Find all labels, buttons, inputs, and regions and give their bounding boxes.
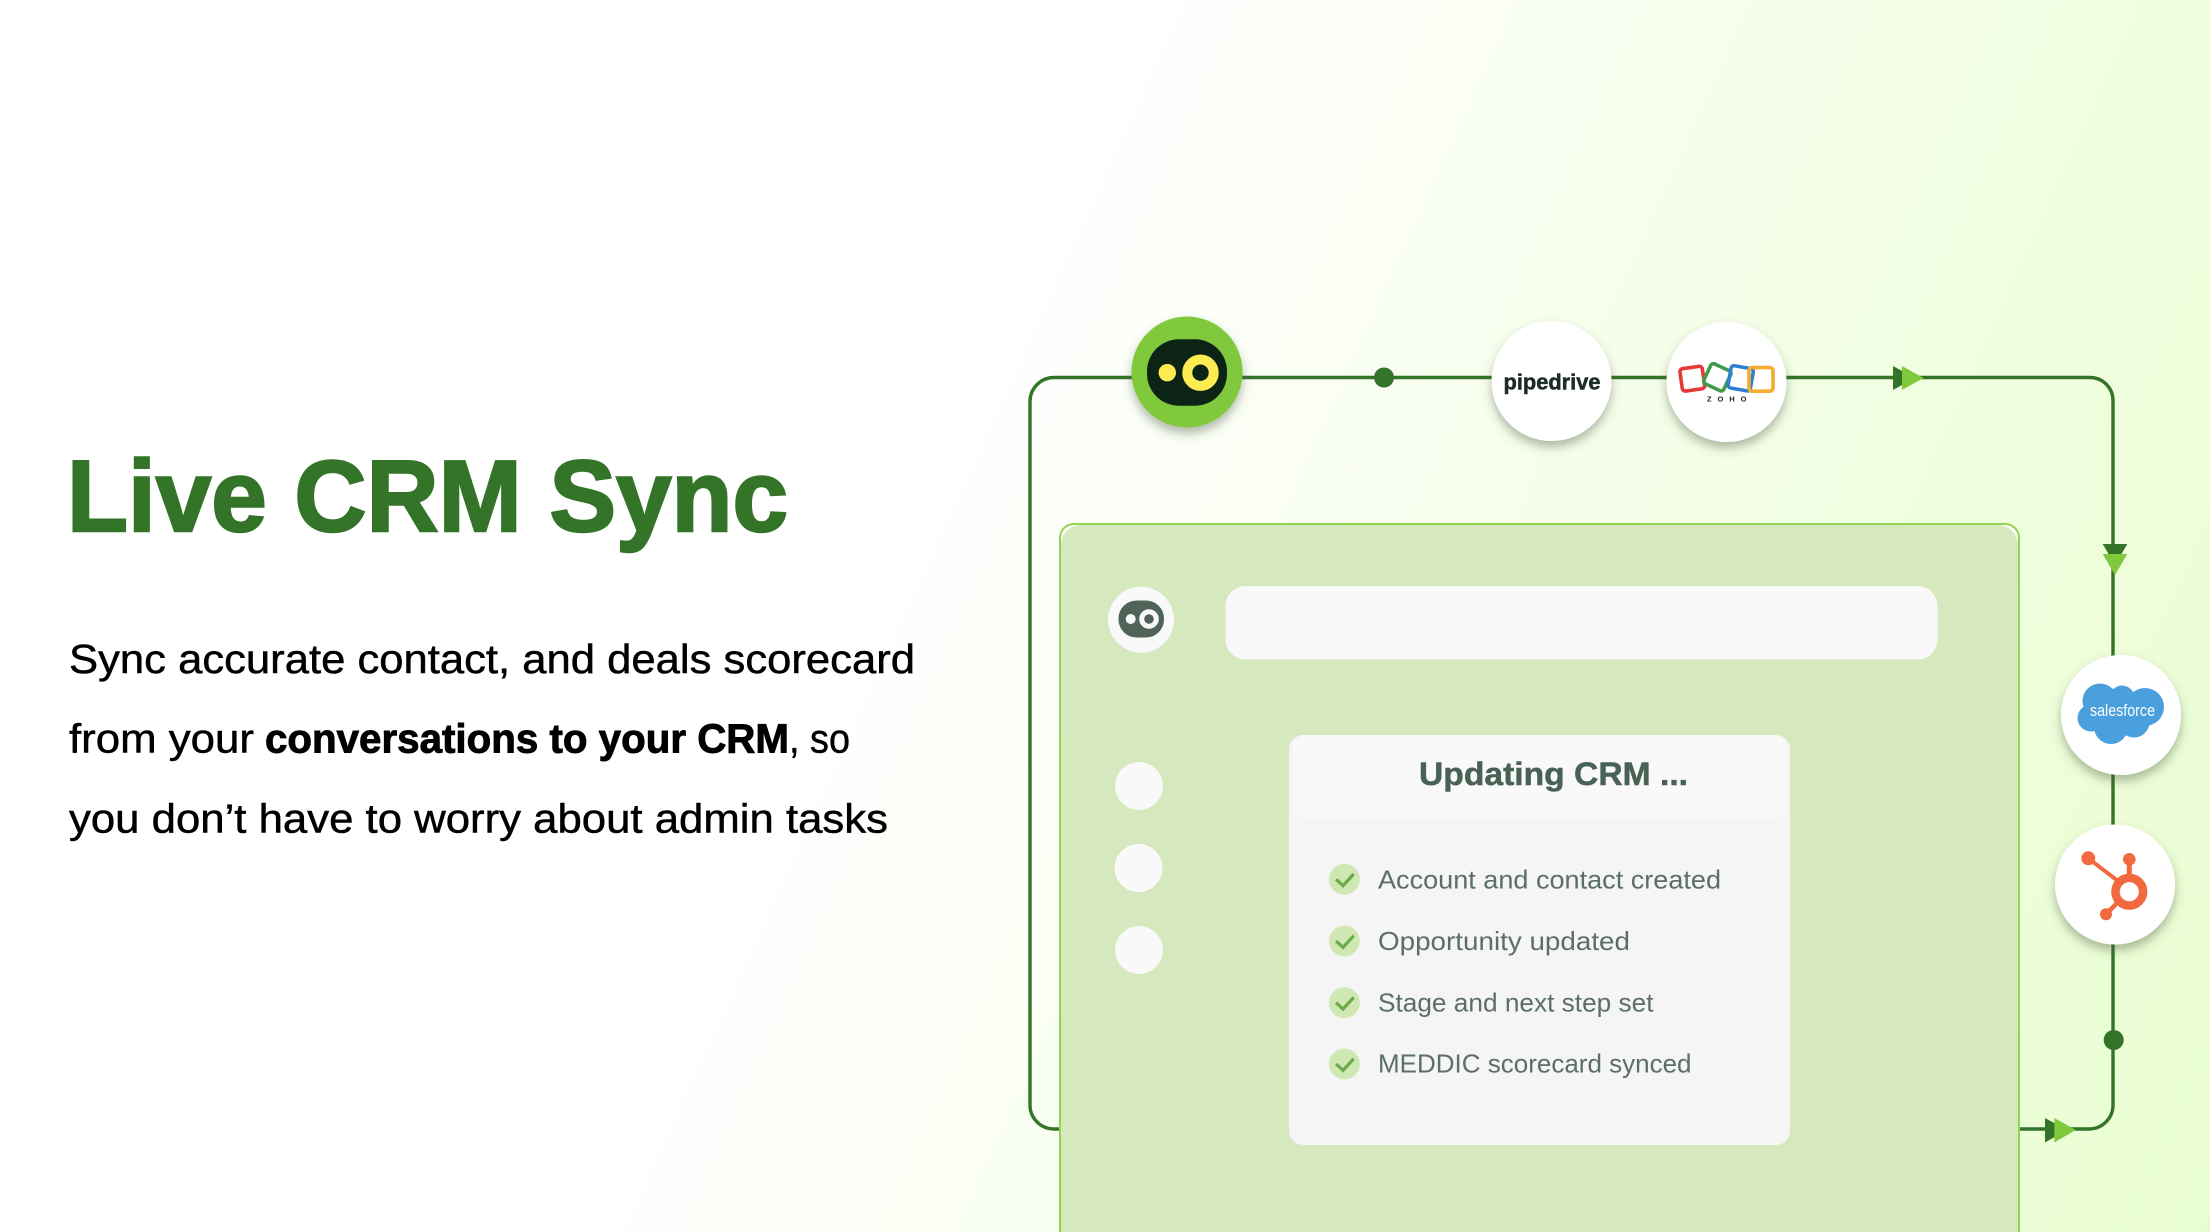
search bar bbox=[1226, 586, 1938, 660]
description text: conversations to your CRM bbox=[265, 716, 789, 762]
panel: app window bbox=[1060, 524, 2019, 1232]
sidebar placeholder dots bbox=[1114, 762, 1163, 974]
title: Live CRM Sync bbox=[67, 441, 788, 553]
icon: salesforce: salesforce bbox=[2090, 701, 2155, 720]
arrow: right down bbox=[2103, 544, 2127, 575]
card title: Updating CRM ... bbox=[1419, 756, 1688, 792]
icon: pipedrive bbox=[1492, 321, 1612, 441]
arrow: bottom right bbox=[2045, 1118, 2076, 1142]
app logo badge bbox=[1108, 587, 1174, 653]
description text: , so bbox=[789, 716, 850, 762]
card: updating CRM bbox=[1289, 735, 1790, 1145]
connector line loop bbox=[1030, 377, 2113, 1129]
checklist item: MEDDIC: MEDDIC scorecard synced bbox=[1378, 1049, 1692, 1079]
checklist item: opportunity: Opportunity updated bbox=[1378, 926, 1630, 956]
description text bbox=[69, 636, 915, 842]
checklist item: account: Account and contact created bbox=[1378, 864, 1721, 894]
arrow: top right bbox=[1893, 366, 1924, 390]
icon: zoho: ZOHO bbox=[1707, 395, 1747, 404]
description text: from your bbox=[69, 716, 254, 762]
connector dot: right bbox=[2104, 1030, 2124, 1050]
icon: zoho bbox=[1666, 322, 1786, 442]
description text: Sync accurate contact, and deals scorecard bbox=[69, 636, 915, 682]
icon: main logo bbox=[1132, 316, 1242, 428]
checklist item: stage: Stage and next step set bbox=[1378, 988, 1654, 1018]
icon: pipedrive: pipedrive bbox=[1504, 370, 1600, 394]
connector dot: top bbox=[1374, 368, 1394, 388]
icon: salesforce bbox=[2061, 655, 2181, 775]
icon: hubspot bbox=[2055, 824, 2175, 944]
description text: you don’t have to worry about admin tasks bbox=[69, 796, 888, 842]
